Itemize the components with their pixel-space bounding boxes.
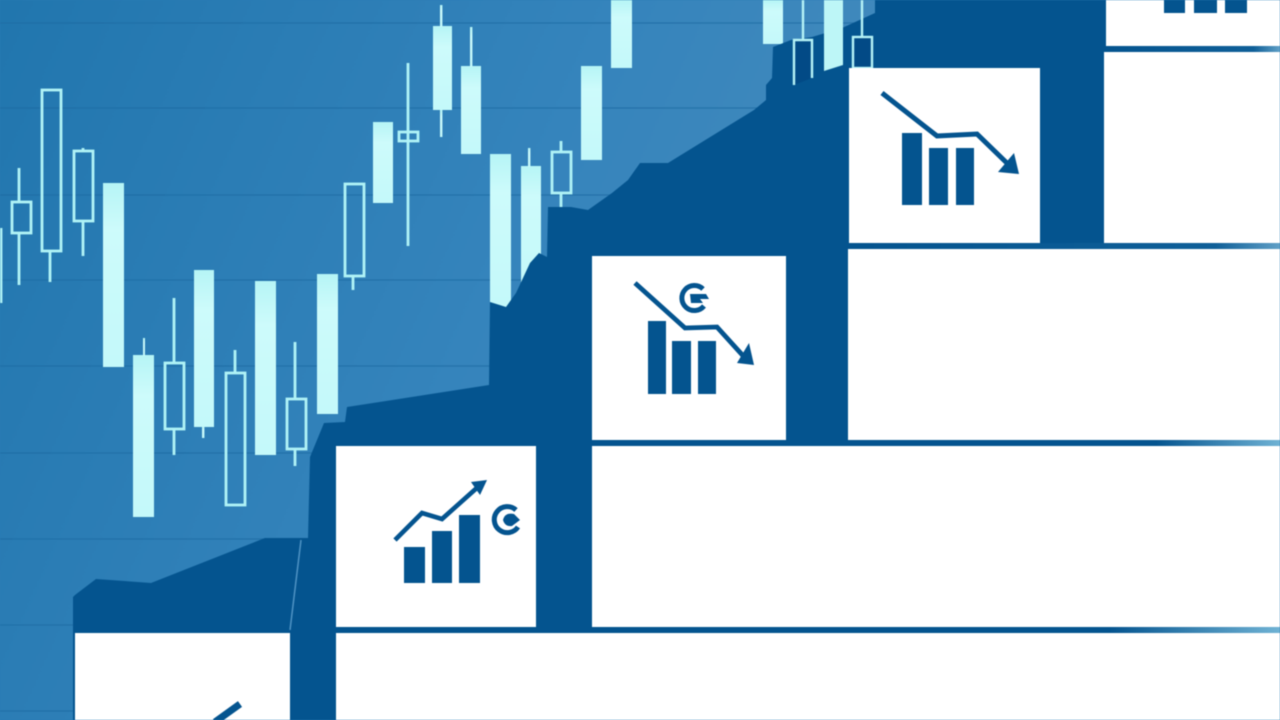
thin light edge bbox=[290, 540, 301, 630]
panel: icon box 1 bbox=[75, 633, 290, 720]
candlestick chart bbox=[1, 0, 783, 517]
hollow candles bbox=[1, 63, 571, 505]
panel: icon box 4 bbox=[849, 68, 1040, 243]
icon: partial rising arrow bbox=[215, 704, 240, 720]
icon: rising bars with arrow bbox=[395, 480, 520, 583]
icon: falling bars with arrow bbox=[635, 283, 754, 394]
slanted cyan candle bbox=[824, 0, 843, 71]
solid candles bbox=[103, 0, 783, 517]
panel: icon box 3 bbox=[592, 256, 786, 440]
panel: wide step 3 bbox=[848, 249, 1280, 440]
top candles over backdrop bbox=[794, 0, 872, 85]
panel: wide step 4 bbox=[1104, 52, 1280, 243]
icon: falling bars with arrow bbox=[882, 93, 1019, 205]
hollow candle at step edge bbox=[853, 0, 872, 68]
hollow candle near top bbox=[794, 0, 812, 85]
panel: wide step 5 bbox=[1106, 0, 1280, 46]
icon: cropped bars top right bbox=[1164, 0, 1247, 13]
panel: wide step 2 bbox=[592, 446, 1280, 627]
panel strips bbox=[336, 46, 1280, 633]
panel: wide step 1 bbox=[336, 633, 1280, 720]
panel: icon box 2 bbox=[336, 446, 536, 627]
